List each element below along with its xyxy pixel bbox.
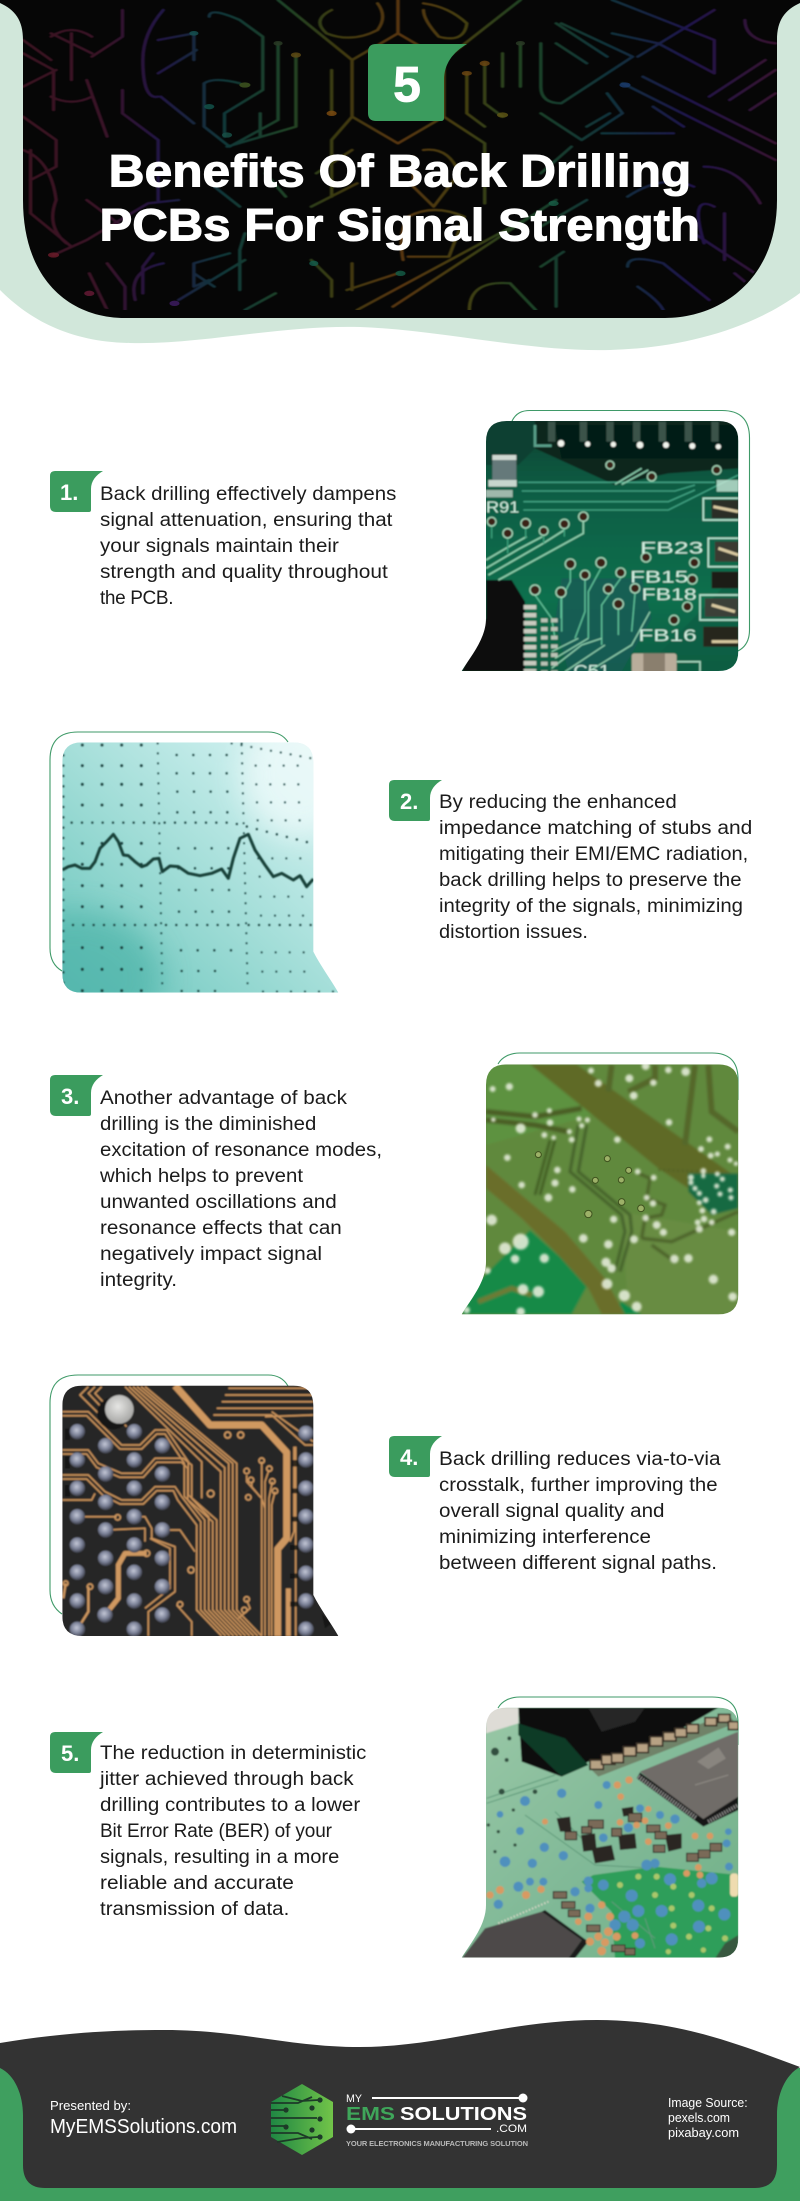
text 1 [100, 484, 396, 609]
presented by [50, 2098, 237, 2138]
text 3: which helps to prevent [99, 1166, 304, 1187]
badge 3 [50, 1075, 103, 1116]
text 5: Bit Error Rate (BER) of your [100, 1821, 333, 1842]
header background: pale green wave [0, 0, 800, 350]
presented by: Presented by: [50, 2098, 131, 2113]
text 3: unwanted oscillations and [100, 1192, 337, 1213]
photo 1: dark green circuit board: FB18 [642, 585, 697, 604]
badge 3: 3. [61, 1084, 79, 1109]
text 5: transmission of data. [100, 1899, 289, 1920]
photo frame outline 3 [498, 1053, 738, 1100]
panel: benefit 2 [49, 732, 751, 993]
text 2: distortion issues. [439, 922, 588, 943]
photo 3: olive green blurred circuit board [462, 1064, 738, 1314]
text 2 [439, 792, 752, 943]
text 4 [439, 1449, 721, 1574]
panel: benefit 1 [50, 405, 755, 681]
badge 2 [389, 780, 442, 821]
image source: pixabay.com [668, 2125, 739, 2140]
badge 5: 5. [61, 1741, 79, 1766]
text 4: overall signal quality and [439, 1501, 664, 1522]
text 5 [99, 1743, 366, 1920]
photo frame outline 4 [50, 1375, 288, 1614]
text 4: Back drilling reduces via-to-via [439, 1449, 721, 1470]
photo frame outline 5 [498, 1697, 738, 1745]
logo wordmark: YOUR ELECTRONICS MANUFACTURING SOLUTION [346, 2139, 528, 2148]
text 2: mitigating their EMI/EMC radiation, [439, 844, 748, 865]
text 3: drilling is the diminished [100, 1114, 316, 1135]
text 3 [99, 1088, 382, 1291]
text 1: your signals maintain their [100, 536, 340, 557]
badge 4 [389, 1436, 442, 1477]
text 5: reliable and accurate [100, 1873, 294, 1894]
logo wordmark [346, 2093, 528, 2148]
photo 1: dark green circuit board [462, 421, 738, 671]
badge 5 [50, 1732, 103, 1773]
image source [668, 2095, 748, 2140]
photo 1: dark green circuit board: FB15 [630, 568, 688, 587]
number badge [368, 44, 467, 121]
text 3: Another advantage of back [100, 1088, 347, 1109]
image source: pexels.com [668, 2110, 730, 2125]
text 4: crosstalk, further improving the [439, 1475, 718, 1496]
text 1: signal attenuation, ensuring that [100, 510, 393, 531]
text 3: excitation of resonance modes, [100, 1140, 382, 1161]
photo frame outline 1 [512, 410, 750, 651]
photo 1: dark green circuit board: FB16 [638, 626, 697, 645]
photo 1: dark green circuit board: C51 [573, 662, 610, 681]
text 5: signals, resulting in a more [100, 1847, 339, 1868]
header panel: dark circuit board [0, 0, 800, 318]
badge 1: 1. [60, 480, 78, 505]
text 5: drilling contributes to a lower [100, 1795, 361, 1816]
text 1: the PCB. [100, 588, 174, 609]
photo frame outline 2 [50, 732, 288, 971]
text 4: minimizing interference [439, 1527, 651, 1548]
photo 4: black circuit board with copper traces [62, 1386, 338, 1636]
title: Benefits Of Back Drilling [109, 146, 691, 197]
number badge: 5 [393, 57, 421, 113]
photo 1: dark green circuit board: R91 [486, 499, 519, 516]
logo [271, 2084, 528, 2155]
title: PCBs For Signal Strength [100, 200, 700, 251]
logo wordmark: SOLUTIONS [400, 2104, 527, 2124]
photo 5: populated circuit board with chips [462, 1708, 738, 1958]
text 3: integrity. [100, 1270, 177, 1291]
badge 1 [50, 471, 103, 512]
logo hexagon icon [271, 2084, 333, 2155]
footer panel [0, 2020, 800, 2201]
image source: Image Source: [668, 2095, 748, 2110]
title [100, 146, 700, 251]
text 3: resonance effects that can [100, 1218, 342, 1239]
text 2: back drilling helps to preserve the [439, 870, 742, 891]
text 2: integrity of the signals, minimizing [439, 896, 743, 917]
logo wordmark: MY [346, 2093, 363, 2105]
circuit trace pattern [23, 0, 776, 310]
text 5: jitter achieved through back [99, 1769, 354, 1790]
text 5: The reduction in deterministic [100, 1743, 366, 1764]
panel: benefit 3 [50, 1045, 755, 1320]
text 1: Back drilling effectively dampens [100, 484, 396, 505]
photo 1: dark green circuit board: FB23 [640, 538, 703, 557]
logo wordmark: EMS [346, 2104, 395, 2124]
text 2: impedance matching of stubs and [439, 818, 752, 839]
photo 2: teal graph paper with waveform [62, 742, 338, 993]
logo wordmark: .COM [496, 2123, 527, 2135]
text 4: between different signal paths. [439, 1553, 717, 1574]
panel: benefit 4 [45, 1365, 721, 1640]
trace end pads [48, 31, 631, 306]
panel: benefit 5 [50, 1695, 755, 1970]
text 2: By reducing the enhanced [439, 792, 677, 813]
presented by: MyEMSSolutions.com [50, 2116, 237, 2138]
badge 4: 4. [400, 1445, 418, 1470]
text 3: negatively impact signal [100, 1244, 322, 1265]
badge 2: 2. [400, 789, 418, 814]
text 1: strength and quality throughout [100, 562, 389, 583]
